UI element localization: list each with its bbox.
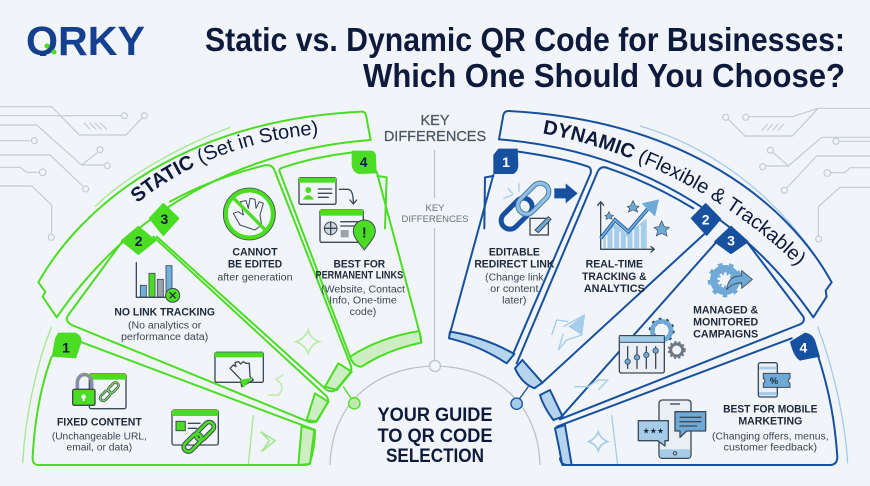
- icon: phone with coupon: [758, 363, 790, 397]
- text: best for mobile marketing: MARKETING: [738, 415, 802, 427]
- text: best for mobile marketing: customer feedback): [724, 443, 817, 454]
- panel: real-time tracking: [515, 167, 720, 388]
- circuit lines right: [723, 108, 870, 242]
- logo: QRKY: [28, 26, 144, 56]
- static banner: [22, 110, 372, 464]
- text: cannot be edited: after generation: [217, 272, 293, 283]
- center guide text: SELECTION: [386, 446, 484, 467]
- text: real-time tracking: REAL-TIME: [586, 259, 643, 271]
- text: best for mobile marketing: [712, 403, 829, 454]
- text: best for permanent links: PERMANENT LINKS: [315, 270, 403, 282]
- key differences label small: [398, 198, 472, 228]
- text: editable redirect link: [474, 246, 555, 306]
- center divider line: [434, 150, 436, 362]
- text: no link tracking: [114, 307, 215, 343]
- panel: cannot be edited: [150, 165, 352, 391]
- text: cannot be edited: BE EDITED: [228, 259, 282, 271]
- icon: star decoration: [589, 432, 608, 451]
- icon: contact card to website: [299, 178, 375, 250]
- badge 1: [493, 149, 518, 174]
- icon: phone with chat bubbles: [638, 400, 706, 458]
- key differences label large: KEY: [420, 113, 450, 129]
- text: fixed content: FIXED CONTENT: [57, 417, 142, 429]
- text: managed campaigns: [693, 305, 758, 341]
- title: [205, 21, 845, 94]
- center guide text: YOUR GUIDE: [378, 405, 492, 426]
- badge 2: [692, 204, 720, 235]
- icon: arrow decoration: [552, 315, 584, 350]
- text: best for mobile marketing: BEST FOR MOBILE: [723, 403, 817, 415]
- text: no link tracking: performance data): [121, 332, 208, 343]
- dynamic banner: [498, 110, 848, 464]
- text: fixed content: (Unchangeable URL,: [52, 431, 147, 442]
- badge 2: 2: [702, 211, 710, 227]
- text: best for permanent links: code): [350, 307, 376, 318]
- text: best for permanent links: Info, One-time: [329, 296, 397, 307]
- badge 1: [52, 333, 82, 358]
- text: editable redirect link: later): [502, 295, 526, 306]
- text: managed campaigns: MANAGED &: [693, 305, 758, 317]
- icon: chevron decoration: [261, 432, 275, 452]
- panel: editable redirect link: [449, 149, 591, 363]
- key differences label small: DIFFERENCES: [401, 214, 469, 225]
- badge 2: [122, 227, 155, 254]
- text: editable redirect link: or content: [490, 284, 539, 295]
- badge 1: 1: [502, 154, 510, 170]
- text: best for permanent links: [315, 259, 405, 318]
- key differences label small: KEY: [425, 203, 445, 214]
- icon: phone with chat bubbles: ★★★: [643, 427, 664, 436]
- bar chart icon: [136, 263, 180, 302]
- icon: star decoration: [296, 330, 319, 353]
- badge 4: 4: [799, 340, 807, 356]
- text: editable redirect link: (Change link: [485, 272, 543, 283]
- badge 4: [352, 151, 377, 174]
- text: fixed content: [52, 417, 147, 454]
- center guide text: TO QR CODE: [378, 426, 492, 447]
- icon: line decoration: [574, 380, 608, 390]
- text: real-time tracking: TRACKING &: [582, 271, 647, 283]
- text: managed campaigns: MONITORED: [693, 317, 758, 329]
- center guide arc: [330, 360, 540, 465]
- badge 1: 1: [62, 340, 70, 356]
- dynamic side: [448, 108, 870, 466]
- text: editable redirect link: REDIRECT LINK: [474, 258, 555, 270]
- icon: arrow decoration: [268, 375, 283, 395]
- panel: managed and monitored campaigns: [540, 227, 804, 420]
- badge 3: [715, 227, 748, 253]
- text: fixed content: email, or data): [66, 443, 132, 454]
- text: no link tracking: NO LINK TRACKING: [114, 307, 215, 319]
- connector node green: [343, 387, 360, 409]
- badge 4: [790, 333, 820, 361]
- text: cannot be edited: CANNOT: [232, 247, 278, 259]
- badge 3: 3: [727, 232, 735, 248]
- static heading: STATIC (Set in Stone): [131, 120, 317, 202]
- badge 3: [150, 204, 178, 235]
- icon: chain with arrow: [498, 180, 578, 235]
- text: best for permanent links: BEST FOR: [333, 259, 385, 271]
- key differences label large: [384, 113, 486, 145]
- panel: fixed content: [33, 333, 315, 465]
- panel: best for permanent links: [279, 151, 421, 367]
- panel: no link tracking: [67, 227, 328, 422]
- badge 2: 2: [135, 233, 143, 249]
- text: real-time tracking: [582, 259, 647, 295]
- dynamic heading: DYNAMIC (Flexible & Trackable): [544, 120, 805, 266]
- text: no link tracking: (No analytics or: [128, 320, 202, 331]
- text: best for permanent links: (Website, Contact: [321, 284, 405, 295]
- center guide text: [378, 405, 492, 467]
- text: best for mobile marketing: (Changing offers, menus,: [712, 431, 829, 442]
- title: Which One Should You Choose?: [363, 57, 845, 94]
- icon: lock and chain window: [73, 374, 126, 409]
- text: editable redirect link: EDITABLE: [489, 246, 540, 258]
- circuit lines left: [0, 107, 147, 240]
- icon: hand prohibited: [223, 188, 275, 240]
- icon: phone with coupon: %: [770, 376, 779, 386]
- icon: settings dashboard: [619, 321, 684, 373]
- key differences label large: DIFFERENCES: [384, 129, 486, 145]
- text: real-time tracking: ANALYTICS: [584, 283, 645, 295]
- static side: [0, 106, 422, 466]
- badge 3: 3: [160, 211, 168, 227]
- icon: gear with arrow: [714, 269, 752, 291]
- text: managed campaigns: CAMPAIGNS: [693, 329, 758, 341]
- icon: growth chart: [598, 199, 669, 252]
- logo: QRKY: QRKY: [26, 18, 145, 64]
- icon: window with chain: [172, 410, 218, 454]
- badge 4: 4: [360, 154, 368, 170]
- icon: contact card to website: !: [362, 225, 367, 241]
- icon: window with hand: [215, 352, 263, 387]
- text: cannot be edited: [217, 247, 293, 283]
- panel: best for mobile marketing: [555, 333, 837, 465]
- connector node blue: [511, 387, 528, 409]
